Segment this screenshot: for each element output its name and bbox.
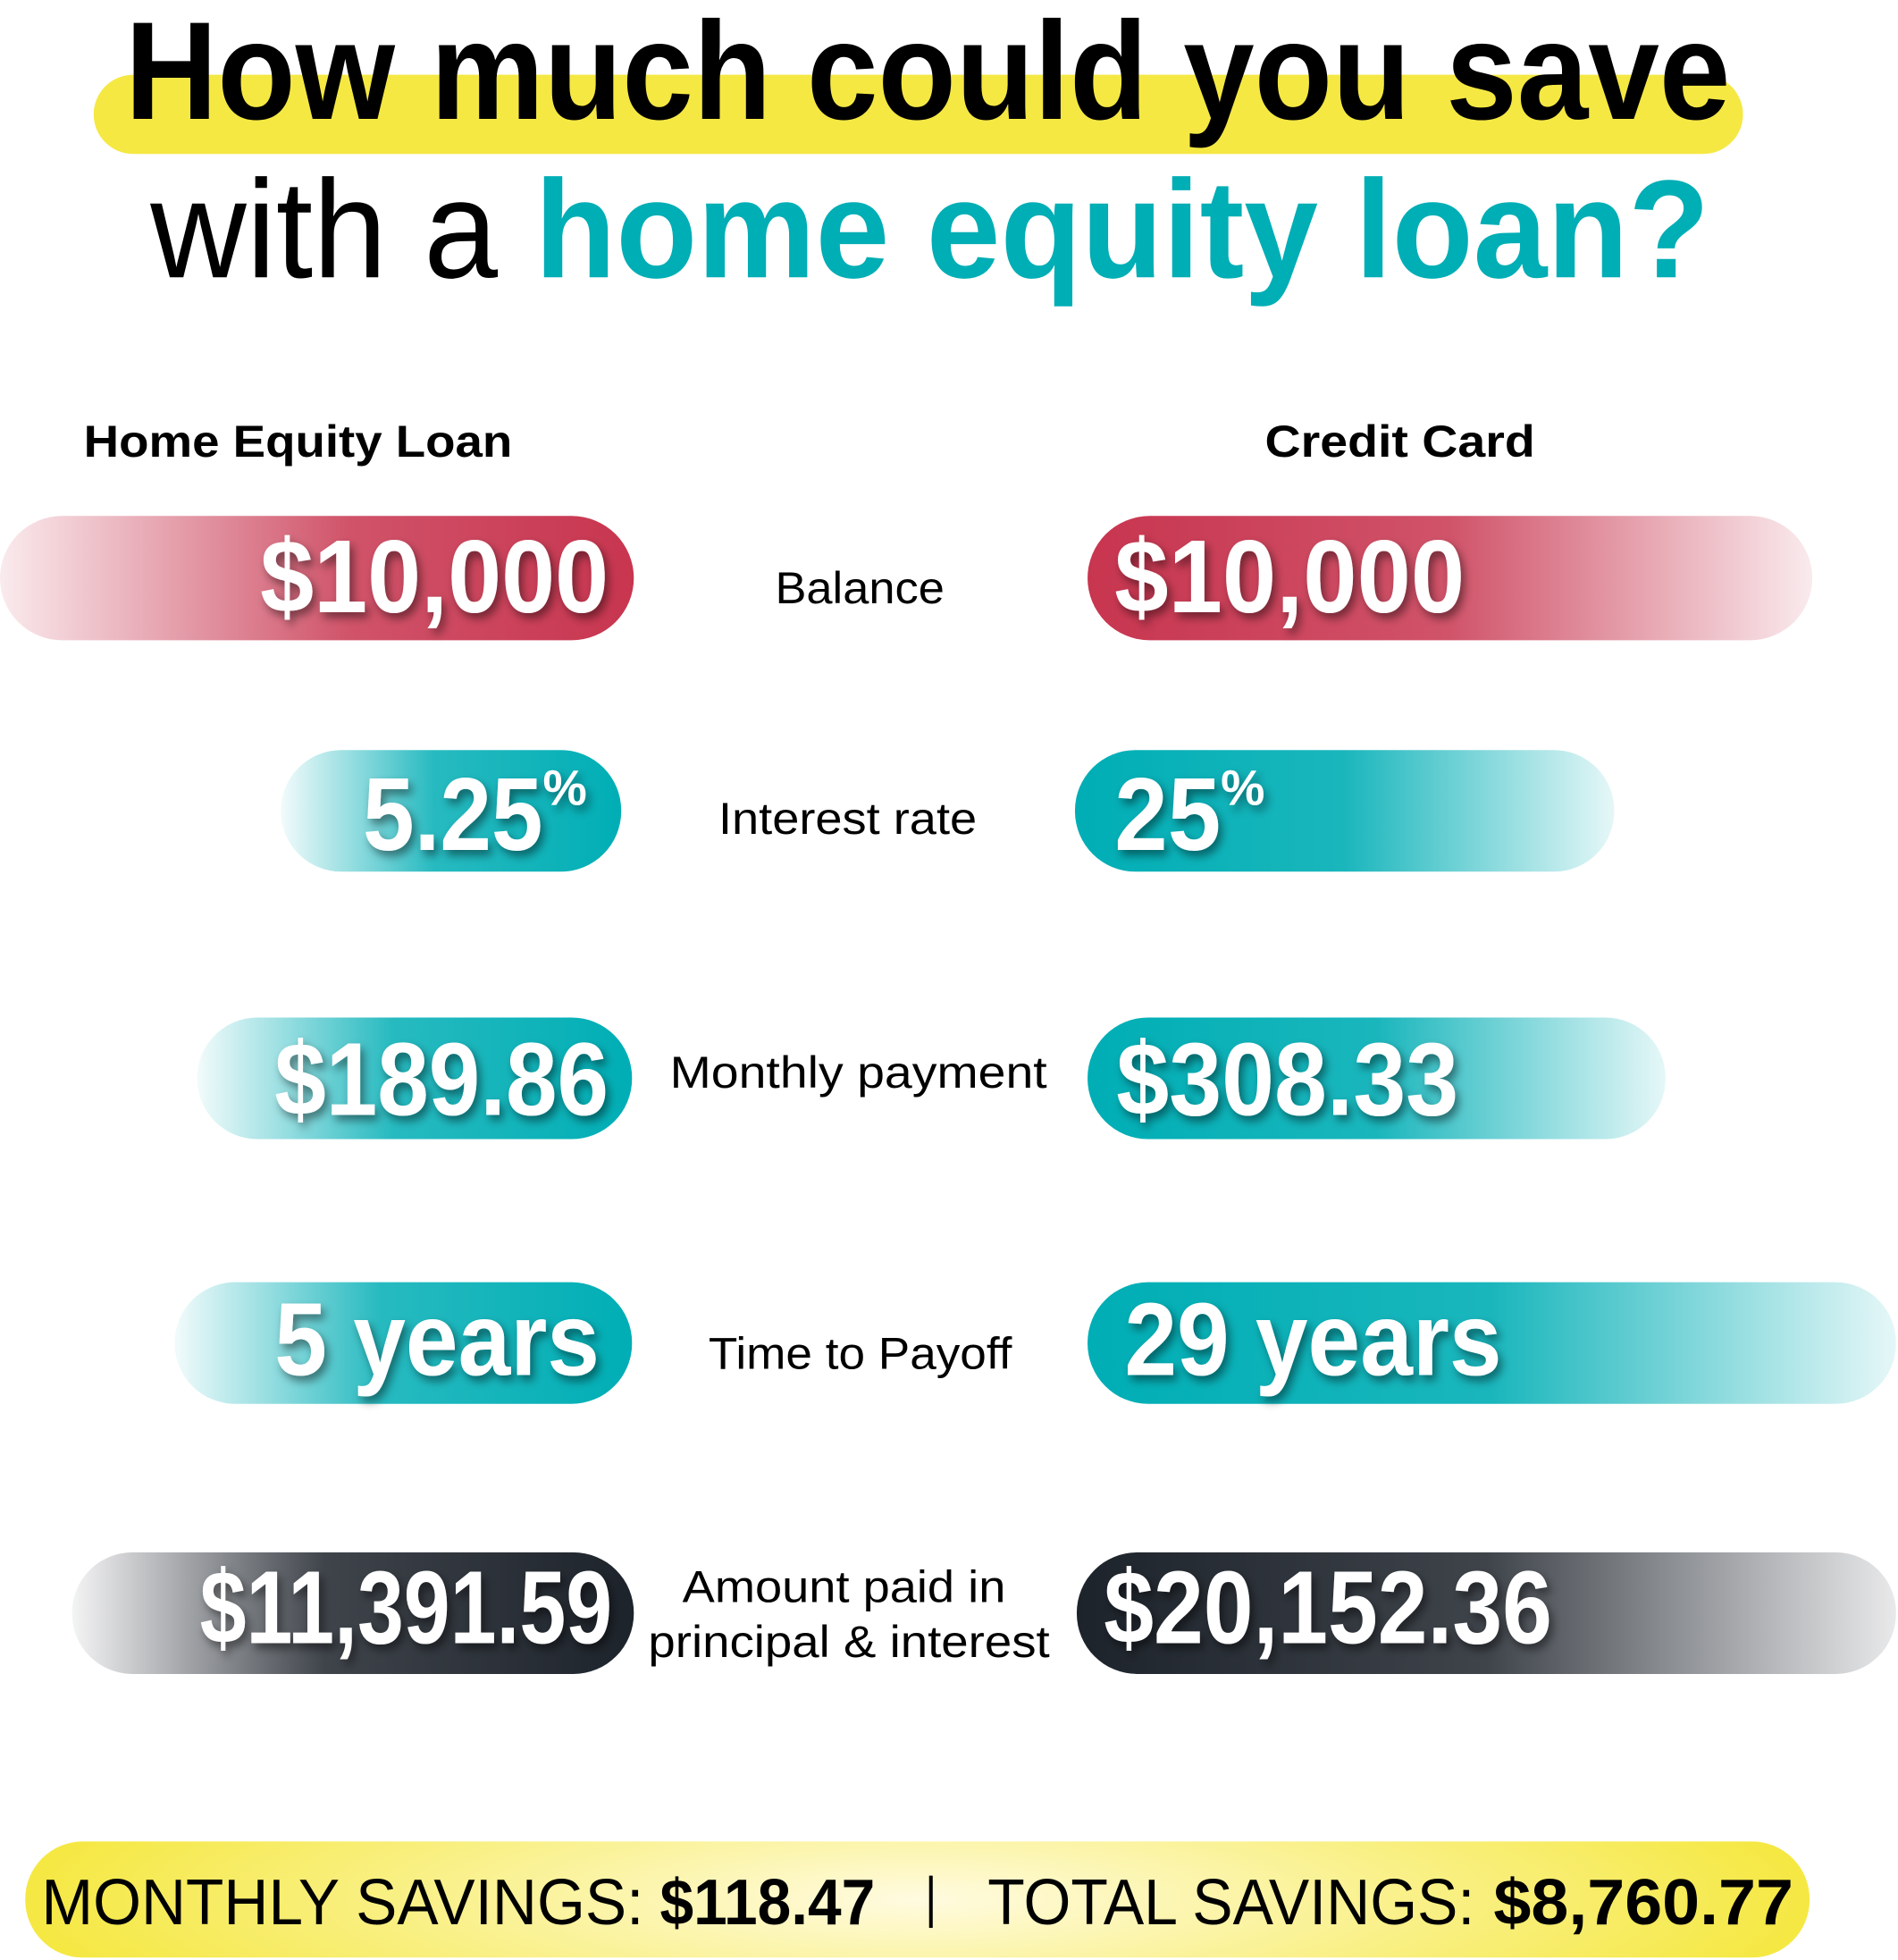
row: time to payoff: 5 years [274,1281,600,1397]
savings banner: TOTAL SAVINGS: [987,1866,1474,1939]
row: amount paid [72,1550,1896,1674]
savings banner: MONTHLY SAVINGS: [41,1866,643,1939]
column header: credit card: Credit Card [1265,416,1535,467]
row: monthly payment: $189.86 [274,1021,609,1137]
row: balance [0,516,1812,640]
row: interest rate: % [1221,761,1264,816]
row: amount paid: $20,152.36 [1104,1550,1552,1666]
row: interest rate: Interest rate [718,793,977,844]
row: amount paid: Amount paid in [683,1560,1005,1611]
column header: home equity loan: Home Equity Loan [84,416,512,467]
row: interest rate: % [543,761,587,816]
savings banner [25,1841,1810,1957]
savings banner: $8,760.77 [1493,1866,1793,1939]
row: amount paid: $11,391.59 [200,1550,612,1666]
row: monthly payment: Monthly payment [670,1047,1047,1098]
row: monthly payment: $308.33 [1116,1021,1458,1137]
title [94,0,1743,307]
row: interest rate: 5.25 [363,756,543,872]
title highlight [94,75,1743,154]
row: interest rate: 25 [1114,756,1221,872]
row: balance: $10,000 [1114,518,1465,635]
row: time to payoff: Time to Payoff [709,1327,1012,1378]
savings banner: $118.47 [659,1866,875,1939]
title line 2: with a home equity loan? [149,152,1709,307]
row: time to payoff [174,1281,1896,1404]
row: time to payoff: 29 years [1124,1281,1502,1397]
row: monthly payment [197,1017,1666,1139]
row: interest rate [281,750,1614,872]
row: balance: $10,000 [260,518,609,635]
row: amount paid: principal & interest [648,1616,1050,1667]
row: balance: Balance [775,562,945,613]
